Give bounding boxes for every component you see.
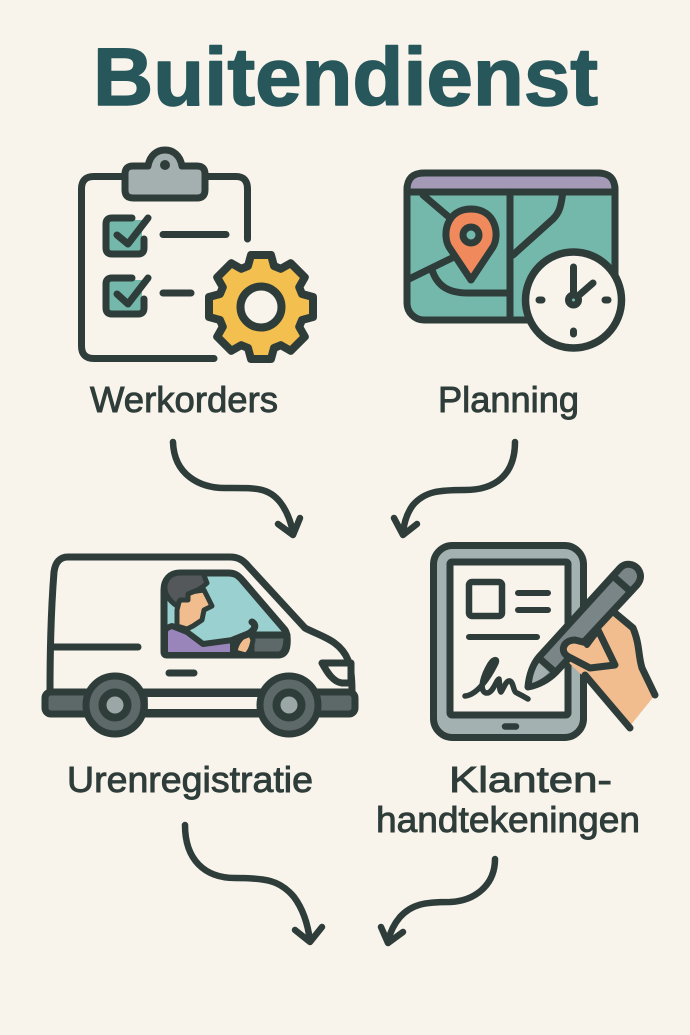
driver hair [165, 573, 207, 606]
clock hands [574, 267, 593, 300]
clipboard board [82, 176, 248, 358]
panel: planning icon [407, 173, 622, 348]
task line 2 [163, 290, 191, 296]
clock hub [568, 295, 578, 305]
arrow: werkorders to urenregistratie [173, 442, 300, 535]
signature [465, 660, 528, 699]
chassis centre lines [148, 694, 258, 712]
pen tip [532, 663, 549, 683]
checkbox 2 [108, 280, 142, 312]
label: klanten-: Klanten- [449, 759, 612, 800]
clip hole [160, 160, 170, 170]
form photo box [469, 582, 502, 616]
hand fill [566, 613, 655, 726]
arrow: klantenhandtekeningen downward [381, 859, 495, 943]
check mark 2 [117, 278, 148, 304]
label: urenregistratie: Urenregistratie [67, 759, 313, 800]
checkbox 1 [108, 220, 142, 252]
chassis bumper [45, 692, 355, 714]
label: handtekeningen: handtekeningen [376, 799, 640, 840]
clipboard clip [125, 150, 205, 198]
map background [407, 173, 615, 320]
label: planning: Planning [438, 379, 579, 420]
clock ticks [539, 300, 608, 334]
front wheel [86, 676, 144, 734]
tablet screen [450, 562, 568, 715]
form lines [469, 593, 548, 637]
panel: werkorders icon [82, 150, 313, 359]
map roads [409, 192, 563, 320]
door handle [169, 670, 194, 676]
panel: urenregistratie van icon [45, 557, 355, 734]
panel: klantenhandtekeningen tablet icon [434, 546, 655, 738]
check mark 1 [117, 218, 148, 244]
thumb [563, 630, 615, 668]
side line [53, 644, 138, 650]
label: werkorders: Werkorders [90, 379, 278, 420]
gear [209, 255, 313, 359]
title: Buitendienst [93, 32, 598, 123]
task line 1 [163, 231, 226, 238]
pen [528, 564, 641, 687]
window glass [164, 573, 287, 655]
arrow: urenregistratie downward [185, 825, 322, 942]
checkbox 2 outline [106, 278, 144, 314]
checkbox 1 outline [106, 218, 144, 254]
finger crease [587, 630, 615, 665]
home button [505, 723, 516, 730]
chassis centre [148, 694, 258, 712]
location pin [446, 209, 496, 280]
driver hand [235, 633, 253, 655]
van body [50, 557, 352, 692]
clock [526, 252, 622, 348]
rear wheel [260, 676, 318, 734]
headlight [322, 663, 351, 683]
tablet frame [434, 546, 584, 738]
dashboard [251, 635, 287, 655]
arrow: planning to klantenhandtekeningen [394, 442, 515, 535]
driver torso [165, 626, 233, 655]
driver neck and face [177, 590, 212, 629]
pin centre [463, 227, 479, 243]
pen bands [539, 576, 630, 672]
purple top bar [407, 173, 615, 192]
steering wheel [233, 622, 255, 640]
hand outer edges [585, 613, 655, 728]
